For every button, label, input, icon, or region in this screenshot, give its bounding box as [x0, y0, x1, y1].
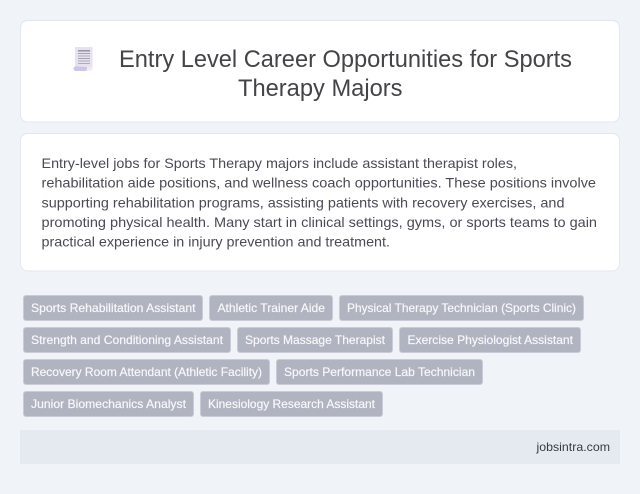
- tag: Recovery Room Attendant: Recovery Room Attendant (Athletic Facility): [31, 365, 262, 379]
- icon: paper scroll: [74, 47, 92, 71]
- tag: Strength and Conditioning Assistant: [24, 328, 230, 352]
- heading: Entry Level Career Opportunities for Sports: [119, 46, 572, 73]
- tag: Exercise Physiologist Assistant: Exercise Physiologist Assistant: [408, 333, 574, 347]
- footer bar: [20, 430, 620, 464]
- tag: Junior Biomechanics Analyst: [24, 392, 194, 416]
- tag: Sports Massage Therapist: [238, 328, 392, 352]
- text block: description: rehabilitation aide positions, and wellness coach opportunities. These positions involve: [42, 175, 596, 191]
- text block: description: promoting physical health. Many start in clinical settings, gyms, or sports teams to gain: [42, 214, 597, 230]
- tag: Sports Performance Lab Technician: Sports Performance Lab Technician: [284, 365, 475, 379]
- text block: description: [42, 155, 597, 250]
- tag: Strength and Conditioning Assistant: Strength and Conditioning Assistant: [31, 333, 224, 347]
- tag: Kinesiology Research Assistant: Kinesiology Research Assistant: [208, 397, 376, 411]
- tag: Sports Rehabilitation Assistant: [24, 296, 202, 320]
- text block: description: supporting rehabilitation programs, assisting patients with recovery exercises, and: [42, 194, 564, 210]
- tag: Kinesiology Research Assistant: [200, 392, 382, 416]
- footer bar: jobsintra.com: [535, 440, 610, 454]
- tag: Physical Therapy Technician: Physical Therapy Technician (Sports Clinic): [347, 301, 576, 315]
- tag: Recovery Room Attendant: [24, 360, 270, 384]
- text block: description: practical experience in injury prevention and treatment.: [42, 234, 390, 250]
- heading: [119, 46, 572, 102]
- tag: Athletic Trainer Aide: [210, 296, 332, 320]
- tag: Junior Biomechanics Analyst: Junior Biomechanics Analyst: [31, 397, 187, 411]
- tag: Athletic Trainer Aide: Athletic Trainer Aide: [218, 301, 325, 315]
- panel: description card: [20, 134, 620, 271]
- tag: Sports Performance Lab Technician: [276, 360, 482, 384]
- tag: Exercise Physiologist Assistant: [400, 328, 580, 352]
- tag list: [24, 296, 584, 416]
- tag: Physical Therapy Technician: [340, 296, 584, 320]
- tag: Sports Massage Therapist: Sports Massage Therapist: [245, 333, 386, 347]
- panel: title card: [20, 20, 620, 122]
- text block: description: Entry-level jobs for Sports Therapy majors include assistant therapist roles,: [42, 155, 517, 171]
- heading: Therapy Majors: [238, 75, 402, 102]
- tag: Sports Rehabilitation Assistant: Sports Rehabilitation Assistant: [31, 301, 196, 315]
